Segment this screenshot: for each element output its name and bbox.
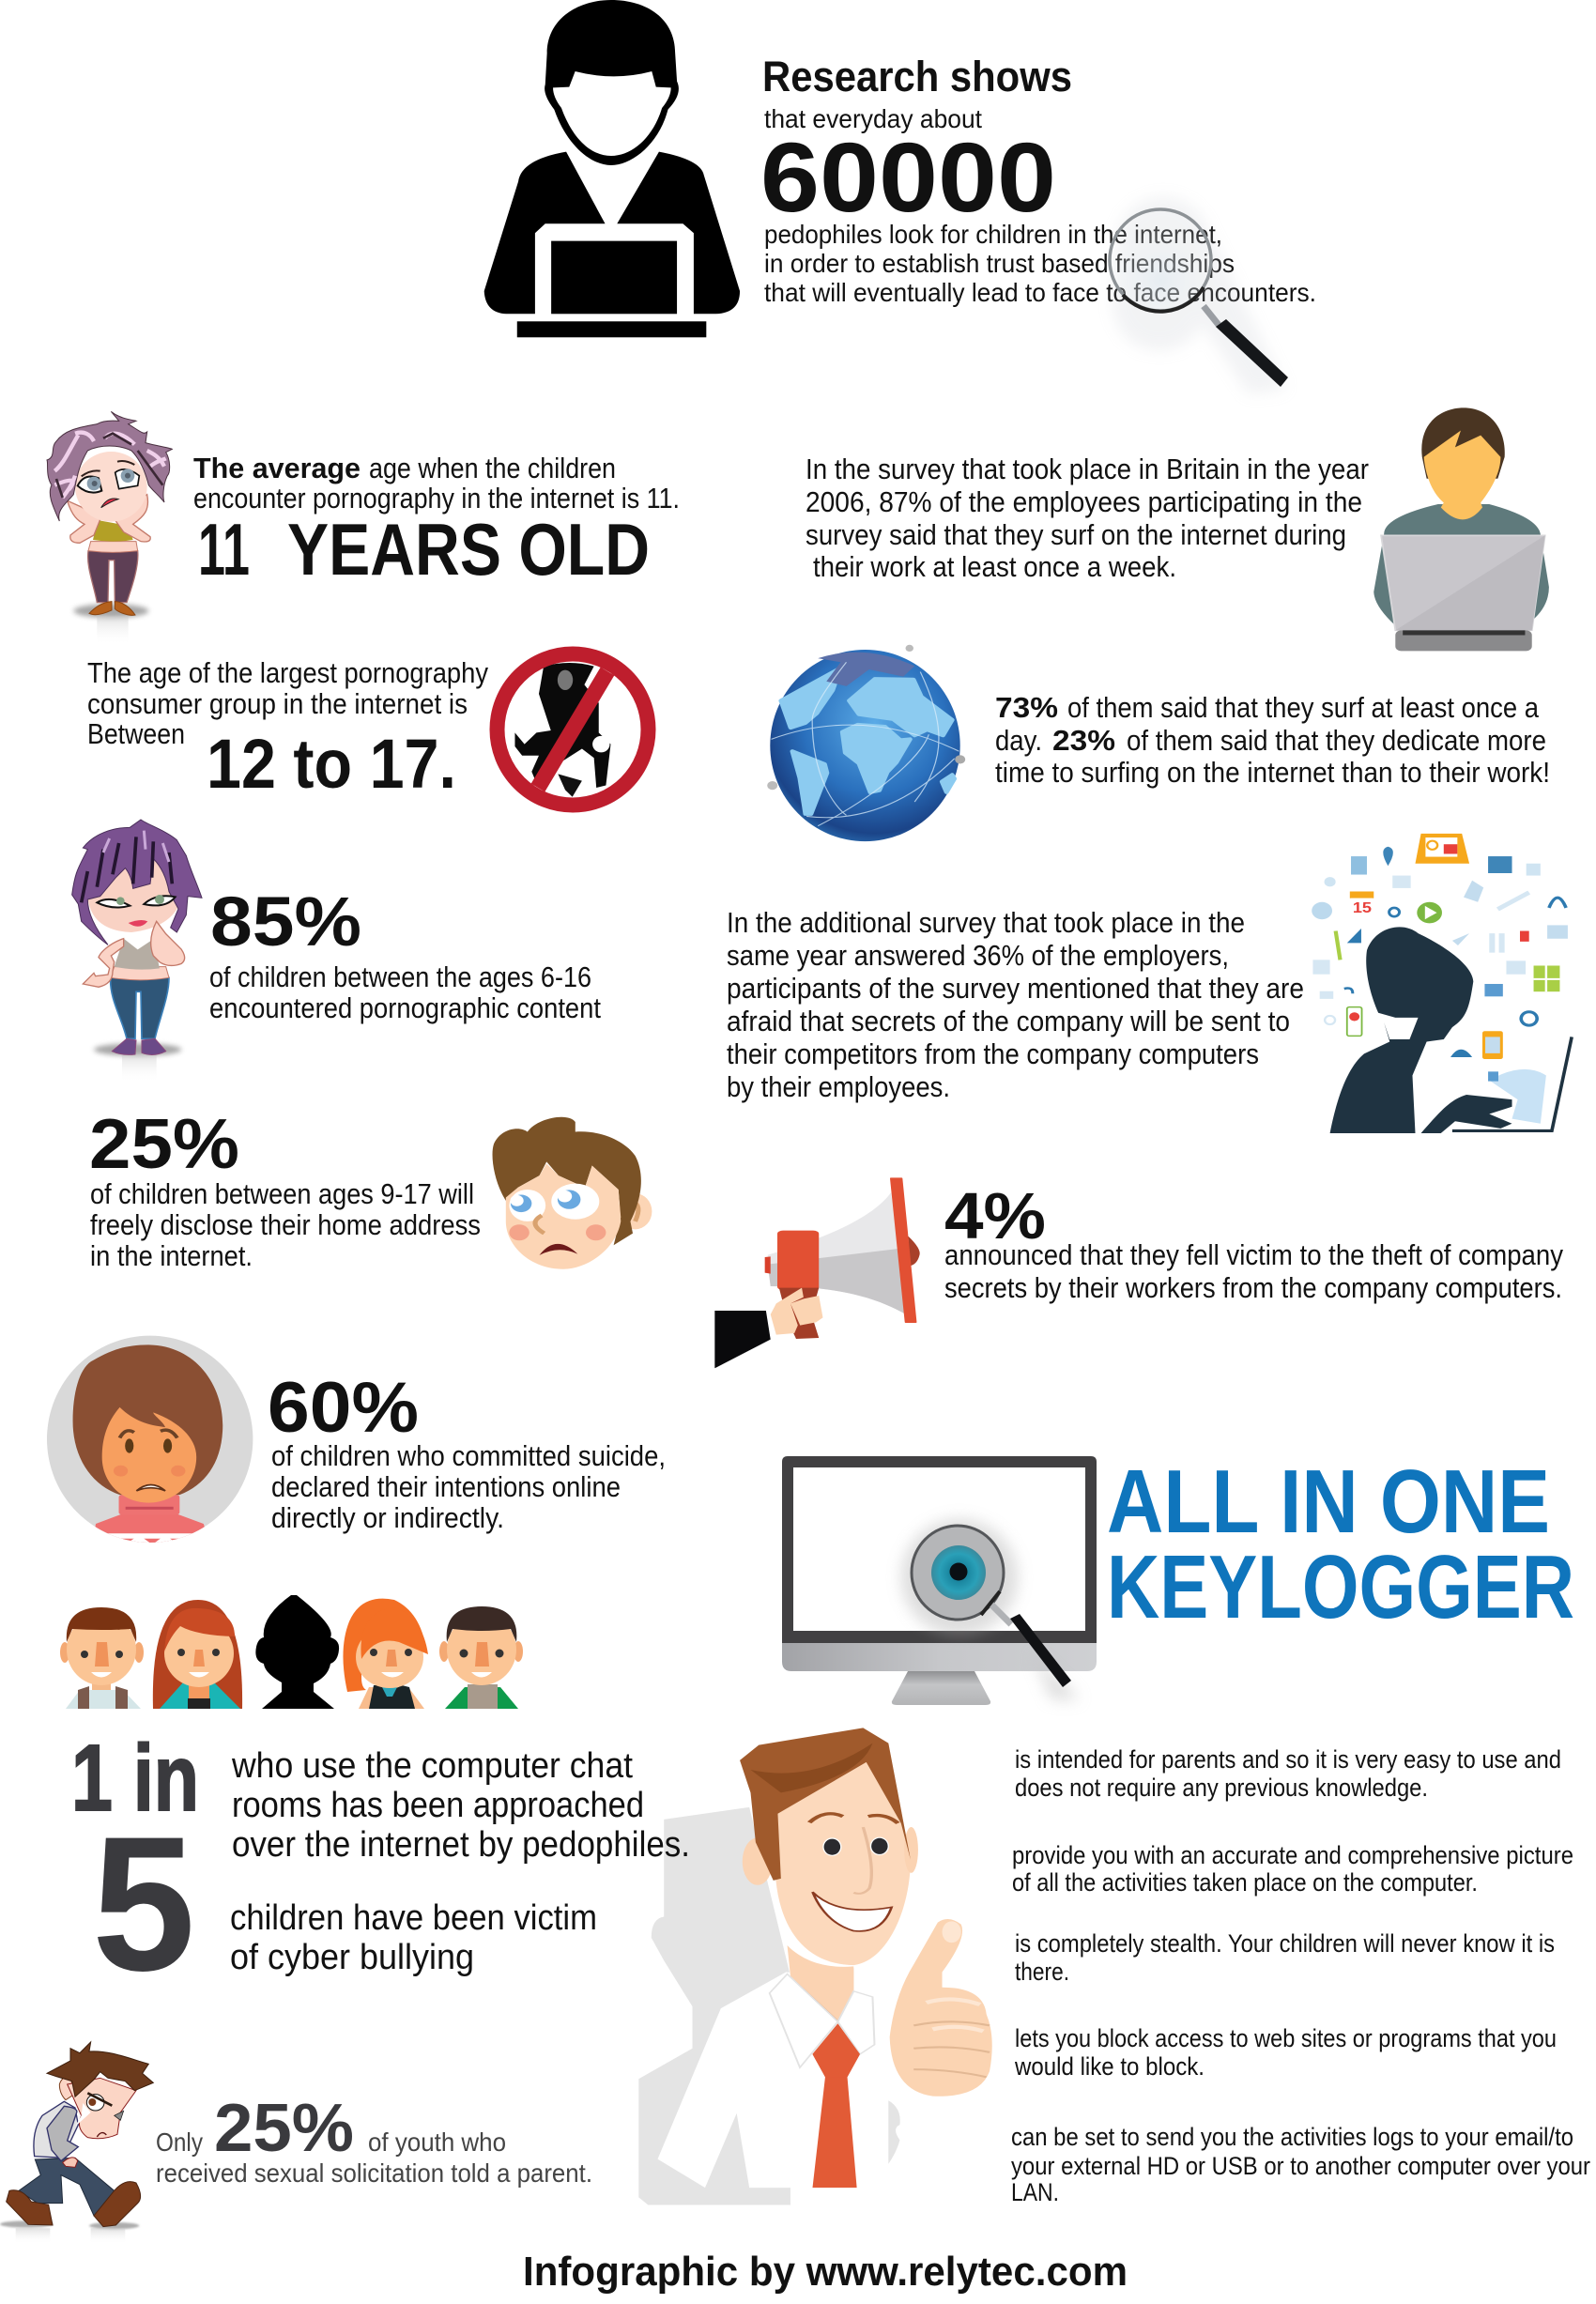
text: largest consumer group — [87, 656, 488, 750]
text: keylogger feature easy to use: does not require any previous knowledge. — [1015, 1774, 1428, 1802]
text: disclose home address: of children between ages 9-17 will — [90, 1177, 474, 1210]
text: keylogger feature stealth: there. — [1015, 1958, 1069, 1986]
text: Britain survey paragraph — [806, 453, 1369, 583]
text: suicide statistic: declared their intentions online — [271, 1470, 621, 1503]
text: largest consumer group: Between — [87, 717, 185, 750]
stat: 11 years old: YEARS OLD — [287, 508, 650, 591]
text: keylogger feature easy to use — [1015, 1745, 1561, 1802]
text: 73 and 23 percent paragraph — [995, 691, 1550, 789]
text: keylogger feature block sites — [1014, 2024, 1557, 2081]
text: only 25 percent told a parent: 25% — [214, 2091, 354, 2166]
text: additional survey paragraph: In the additional survey that took place in the — [727, 906, 1245, 939]
text: Britain survey paragraph: In the survey that took place in Britain in the year — [806, 453, 1369, 485]
text: 73 and 23 percent paragraph: of them said that they dedicate more — [1127, 724, 1546, 757]
text: cyber bullying statistic: of cyber bullying — [230, 1938, 474, 1977]
character: thinking girl — [72, 820, 202, 1083]
text: chat rooms statistic: who use the computer chat — [231, 1746, 633, 1786]
text: 73 and 23 percent paragraph: day. — [995, 724, 1042, 757]
icon: row of five children — [60, 1595, 523, 1709]
icon: woman at laptop with app icons: 15 — [1353, 899, 1372, 916]
text: the average age paragraph: age when the children — [369, 452, 616, 484]
text: suicide statistic: of children who committed suicide, — [271, 1439, 666, 1472]
text: only 25 percent told a parent — [156, 2091, 592, 2188]
text: cyber bullying statistic: children have been victim — [230, 1898, 597, 1938]
text: disclose home address: in the internet. — [90, 1239, 253, 1272]
text: Britain survey paragraph: 2006, 87% of the employees participating in the — [806, 485, 1362, 518]
icon: monitor with eye magnifier — [782, 1456, 1097, 1705]
text: 73 and 23 percent paragraph: 23% — [1052, 724, 1115, 757]
text: additional survey paragraph: their competitors from the company computers — [727, 1037, 1259, 1070]
icon: sad woman portrait — [47, 1336, 253, 1544]
kid 2 — [153, 1600, 242, 1709]
text: Britain survey paragraph: their work at least once a week. — [813, 550, 1176, 583]
text: keylogger feature comprehensive picture — [1012, 1841, 1573, 1897]
character: thumbs-up businessman — [638, 1728, 992, 2204]
stat: 60 percent: 60% — [268, 1368, 419, 1448]
text: suicide statistic — [271, 1439, 666, 1534]
text: additional survey paragraph: afraid that secrets of the company will be sent to — [727, 1005, 1290, 1037]
text: keylogger feature send logs: LAN. — [1011, 2178, 1059, 2206]
stat: 60000: 60000 — [760, 123, 1056, 233]
icon: woman at laptop with app icons — [1312, 834, 1572, 1133]
stat: 1 in 5 — [71, 1726, 199, 2011]
text: disclose home address — [90, 1177, 481, 1272]
icon: globe — [767, 645, 965, 841]
stat: 4 percent: 4% — [944, 1179, 1046, 1252]
heading: research shows: Research shows — [762, 53, 1072, 100]
text: additional survey paragraph — [727, 906, 1304, 1103]
heading: all in one keylogger — [1107, 1452, 1574, 1637]
text: chat rooms statistic — [231, 1746, 690, 1865]
text: largest consumer group: The age of the largest pornography — [87, 656, 488, 689]
stat: 25 percent home address: 25% — [89, 1104, 239, 1183]
kid 1 — [60, 1607, 144, 1709]
footer credit: Infographic by www.relytec.com — [523, 2249, 1128, 2295]
text: the average age paragraph: encounter pornography in the internet is 11. — [193, 482, 680, 515]
text: the average age paragraph — [193, 452, 680, 515]
character: sad walking boy — [0, 2042, 153, 2244]
man shadow — [638, 1807, 900, 2204]
text: only 25 percent told a parent: of youth who — [368, 2127, 506, 2157]
text: additional survey paragraph: same year answered 36% of the employers, — [727, 939, 1229, 972]
text: pedophiles intro paragraph: pedophiles look for children in the internet, — [764, 220, 1222, 249]
text: keylogger feature comprehensive picture: of all the activities taken place on the computer. — [1012, 1868, 1478, 1897]
icon: magnifying glass — [1110, 197, 1288, 394]
icon: crying boy face — [493, 1117, 652, 1269]
stat: 11 years old: 11 — [198, 508, 250, 591]
text: pedophiles intro paragraph: in order to establish trust based friendships — [764, 249, 1235, 278]
kid 4 — [343, 1599, 428, 1709]
text: children encountered content: of children between the ages 6-16 — [209, 960, 591, 993]
text: pedophiles intro paragraph — [764, 220, 1316, 307]
stat: 12 to 17: 12 to 17. — [207, 725, 456, 803]
text: keylogger feature send logs — [1011, 2123, 1590, 2206]
icon: prohibition sign with figure — [498, 653, 648, 806]
stat: 1 in 5: 1 in — [71, 1726, 199, 1831]
text: that everyday about: that everyday about — [764, 104, 982, 133]
text: pedophiles intro paragraph: that will eventually lead to face to face encounters. — [764, 278, 1316, 307]
kid 3 silhouette — [255, 1595, 339, 1709]
text: 73 and 23 percent paragraph: of them said that they surf at least once a — [1067, 691, 1540, 724]
icon: silhouette person at laptop — [484, 0, 740, 337]
text: keylogger feature stealth — [1015, 1929, 1555, 1986]
text: the average age paragraph: The average — [193, 452, 361, 484]
character: worried girl — [47, 411, 172, 645]
icon: person with laptop — [1373, 407, 1549, 651]
stat: 85 percent: 85% — [210, 883, 361, 960]
stat: 1 in 5: 5 — [92, 1797, 195, 2011]
text: additional survey paragraph: by their employees. — [727, 1070, 950, 1103]
text: keylogger feature block sites: would like to block. — [1014, 2052, 1205, 2081]
text: children encountered content: encountered pornographic content — [209, 991, 601, 1024]
text: only 25 percent told a parent: Only — [156, 2127, 203, 2157]
text: largest consumer group: consumer group in the internet is — [87, 687, 468, 720]
text: theft of company secrets — [944, 1238, 1563, 1304]
text: only 25 percent told a parent: received sexual solicitation told a parent. — [156, 2158, 592, 2188]
text: additional survey paragraph: participants of the survey mentioned that they are — [727, 972, 1304, 1005]
text: chat rooms statistic: over the internet by pedophiles. — [232, 1825, 690, 1865]
kid 5 — [439, 1606, 523, 1709]
text: children encountered content — [209, 960, 601, 1024]
text: Britain survey paragraph: survey said that they surf on the internet during — [806, 518, 1346, 551]
icon: megaphone with hand — [714, 1178, 920, 1368]
text: 73 and 23 percent paragraph: 73% — [995, 691, 1058, 724]
text: cyber bullying statistic — [230, 1898, 597, 1977]
text: 73 and 23 percent paragraph: time to surfing on the internet than to their work! — [995, 756, 1550, 789]
text: chat rooms statistic: rooms has been approached — [232, 1786, 644, 1825]
text: disclose home address: freely disclose their home address — [90, 1208, 481, 1241]
text: suicide statistic: directly or indirectly. — [271, 1501, 504, 1534]
